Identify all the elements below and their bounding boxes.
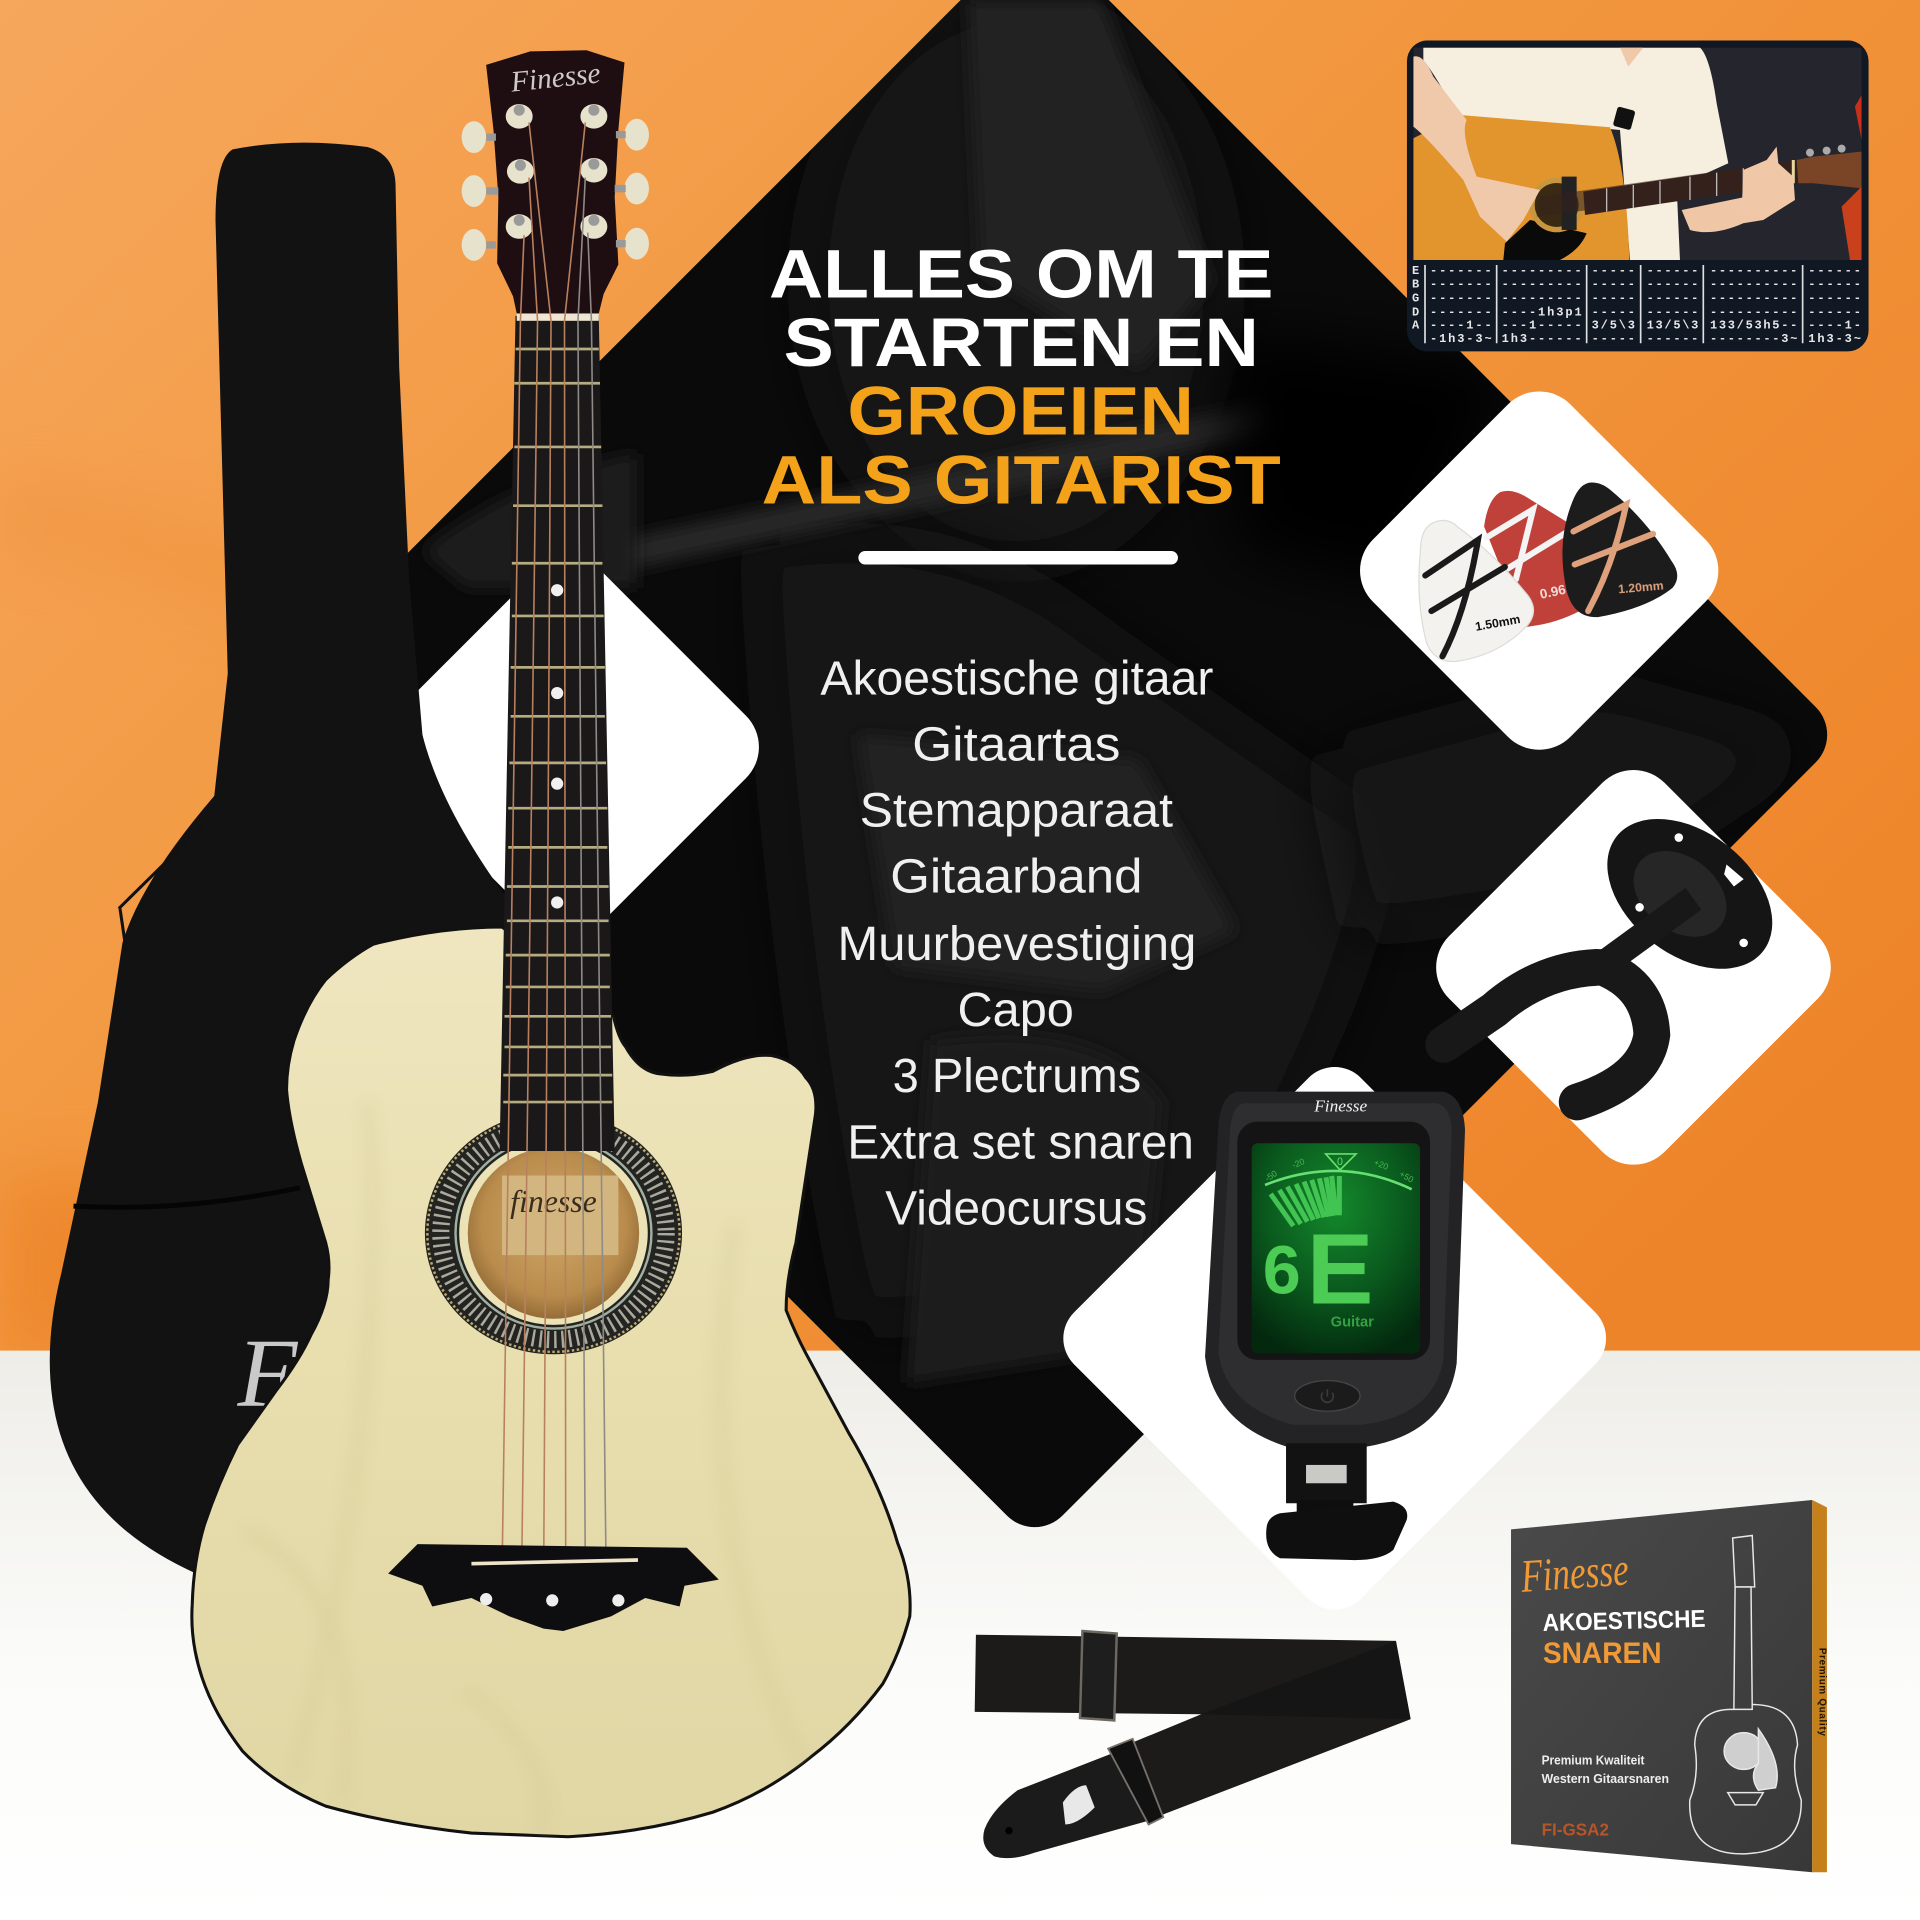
contents list: Videocursus [885, 1182, 1147, 1235]
guitar tab: ------ [1647, 264, 1698, 278]
wall hook [1444, 788, 1801, 1102]
guitar tab: ----1-- [1430, 319, 1492, 333]
guitar tab: ---------- [1710, 278, 1797, 292]
tuner display: +50 [1398, 1169, 1416, 1185]
white pick: 1.50mm [1474, 612, 1521, 634]
guitar tab: 1h3-3~ [1808, 332, 1861, 346]
acoustic guitar [192, 50, 910, 1837]
sound hole label: finesse [510, 1184, 597, 1219]
contents list: Capo [958, 984, 1074, 1037]
guitar strap [975, 1631, 1411, 1858]
box of strings: Premium Quality [1817, 1648, 1828, 1737]
guitar tab: ---------- [1710, 264, 1797, 278]
title [762, 236, 1281, 518]
guitar tab: ------ [1808, 305, 1861, 319]
guitar tab: ------ [1647, 332, 1698, 346]
tuner display: 6 [1263, 1232, 1301, 1308]
panel: plectrums diamond [1342, 373, 1737, 768]
guitar tab: ---1----- [1502, 319, 1582, 333]
guitar tab: ------ [1647, 292, 1698, 306]
red pick [1484, 491, 1582, 627]
guitar tab: --------- [1502, 264, 1582, 278]
contents list: Gitaartas [912, 718, 1120, 771]
guitar tab [1412, 264, 1861, 346]
guitar tab: ---------- [1710, 292, 1797, 306]
neck and fretboard [500, 316, 615, 1151]
leather end [983, 1739, 1163, 1858]
guitar tab: ----1h3p1 [1502, 305, 1582, 319]
box description [1542, 1752, 1669, 1786]
guitar tab: ---------- [1710, 305, 1797, 319]
guitar tab: ----- [1592, 332, 1635, 346]
box description: Premium Kwaliteit [1542, 1752, 1645, 1767]
guitar tab: ----- [1592, 264, 1635, 278]
guitar tab: --------- [1502, 292, 1582, 306]
guitar tab: ------- [1430, 278, 1492, 292]
guitar tab: ------ [1808, 292, 1861, 306]
bridge [388, 1544, 719, 1631]
contents list: Stemapparaat [860, 785, 1173, 838]
guitar tab: ----1- [1808, 319, 1861, 333]
box title: AKOESTISCHE [1542, 1606, 1706, 1637]
box guitar line art [1690, 1536, 1801, 1854]
headstock logo: Finesse [508, 57, 602, 99]
guitar bag [50, 143, 527, 1573]
guitar tab: ----- [1592, 305, 1635, 319]
title: ALLES OM TE [769, 236, 1273, 313]
guitar tab: ------ [1808, 278, 1861, 292]
divider bar [858, 551, 1178, 564]
black pick: 1.20mm [1618, 578, 1664, 596]
tuner display [1252, 1143, 1420, 1353]
contents list: Akoestische gitaar [820, 652, 1214, 705]
black pick [1562, 482, 1677, 617]
box title [1542, 1606, 1706, 1670]
white pick [1419, 520, 1533, 661]
white floor [0, 1351, 1920, 1920]
guitar tab: ------ [1808, 264, 1861, 278]
guitar tab: ------ [1647, 305, 1698, 319]
tuner display: Guitar [1331, 1315, 1374, 1331]
panel: black diamond with faint photo [408, 0, 1828, 1528]
guitar tab: ------ [1647, 278, 1698, 292]
tuner display: -50 [1263, 1168, 1279, 1184]
guitar tab: ----- [1592, 292, 1635, 306]
power button [1295, 1381, 1360, 1411]
title: GROEIEN [847, 373, 1194, 450]
guitar tab: 13/5\3 [1647, 319, 1698, 333]
orange wall background [0, 0, 1920, 1365]
guitar tab: 1h3------ [1502, 332, 1582, 346]
guitar tab: 3/5\3 [1592, 319, 1635, 333]
contents list: 3 Plectrums [893, 1050, 1141, 1103]
tuner display: 0 [1337, 1156, 1343, 1168]
sound hole label [502, 1176, 618, 1255]
guitar tab: -1h3-3~ [1430, 332, 1492, 346]
plectrums [1419, 482, 1677, 661]
strings [502, 122, 606, 1573]
guitar tab: 133/53h5-- [1710, 319, 1797, 333]
red pick: 0.96 [1538, 582, 1567, 602]
contents list [820, 652, 1214, 1235]
contents list: Gitaarband [890, 851, 1142, 904]
guitar tab: --------3~ [1710, 332, 1797, 346]
clip-on tuner [1205, 1092, 1465, 1560]
tuner logo: Finesse [1313, 1097, 1367, 1116]
guitar tab: ------- [1430, 264, 1492, 278]
video frame [1413, 48, 1862, 260]
guitar tab: B [1412, 278, 1419, 292]
guitar tab: A [1412, 319, 1420, 333]
guitar tab: G [1412, 292, 1419, 306]
tablet with video course [1407, 40, 1869, 351]
contents list: Muurbevestiging [838, 918, 1196, 971]
guitar tab: ------- [1430, 305, 1492, 319]
title: ALS GITARIST [762, 441, 1281, 518]
guitar tab: E [1412, 264, 1419, 278]
bag logo: F [237, 1320, 299, 1428]
box title: SNAREN [1543, 1637, 1662, 1670]
contents list: Extra set snaren [847, 1116, 1194, 1169]
box of strings [1511, 1500, 1828, 1872]
strap slider [1080, 1631, 1117, 1720]
tuner display: +20 [1372, 1157, 1390, 1172]
panel: tuner diamond [1048, 1052, 1621, 1625]
guitar tab: ----- [1592, 278, 1635, 292]
guitar tab: ------- [1430, 292, 1492, 306]
rosette [425, 1112, 682, 1354]
panel: wall hook diamond [1418, 752, 1849, 1183]
panel: left white diamond [362, 539, 777, 955]
headstock [462, 50, 649, 321]
guitar body [192, 927, 910, 1837]
title: STARTEN EN [784, 304, 1259, 381]
guitar tab: D [1412, 305, 1419, 319]
box description: Western Gitaarsnaren [1542, 1771, 1669, 1786]
guitar tab: --------- [1502, 278, 1582, 292]
box brand: Finesse [1518, 1544, 1630, 1603]
tuner display: E [1307, 1213, 1373, 1325]
box product code: FI-GSA2 [1542, 1820, 1609, 1840]
tuner display: -20 [1291, 1156, 1306, 1170]
tuner clip mount [1266, 1443, 1407, 1560]
